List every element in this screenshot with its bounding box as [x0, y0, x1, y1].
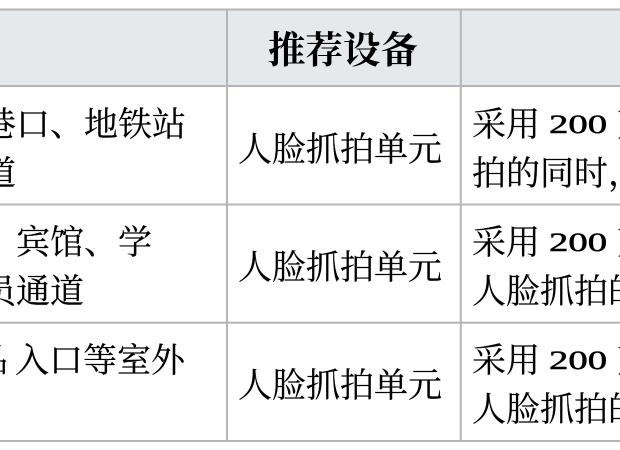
row 2: scenario: 宾馆、学: [16, 224, 152, 262]
row 1: description: [472, 107, 620, 193]
row 1: description: 采用: [472, 107, 540, 144]
row 2: device: 人脸抓拍单元: [238, 249, 442, 287]
row 2: description: 采用: [472, 225, 540, 262]
header row background: [0, 10, 620, 85]
row 2: description: 200: [549, 229, 607, 257]
row 2: description: [472, 225, 620, 311]
row 3: description: [472, 343, 620, 429]
row 1: device: 人脸抓拍单元: [238, 131, 442, 169]
header: recommended device: 推荐设备: [268, 30, 418, 72]
row 2: scenario: [0, 224, 152, 311]
row 1: scenario: 口、地铁站: [16, 106, 186, 144]
row 3: scenario: 入口等室外: [15, 342, 186, 380]
row 1: description: 200: [549, 111, 607, 139]
row 3: device: 人脸抓拍单元: [238, 367, 442, 405]
row 1: scenario: [0, 106, 186, 193]
row 3: description: 采用: [472, 343, 540, 380]
row 3: description: 200: [549, 347, 607, 375]
